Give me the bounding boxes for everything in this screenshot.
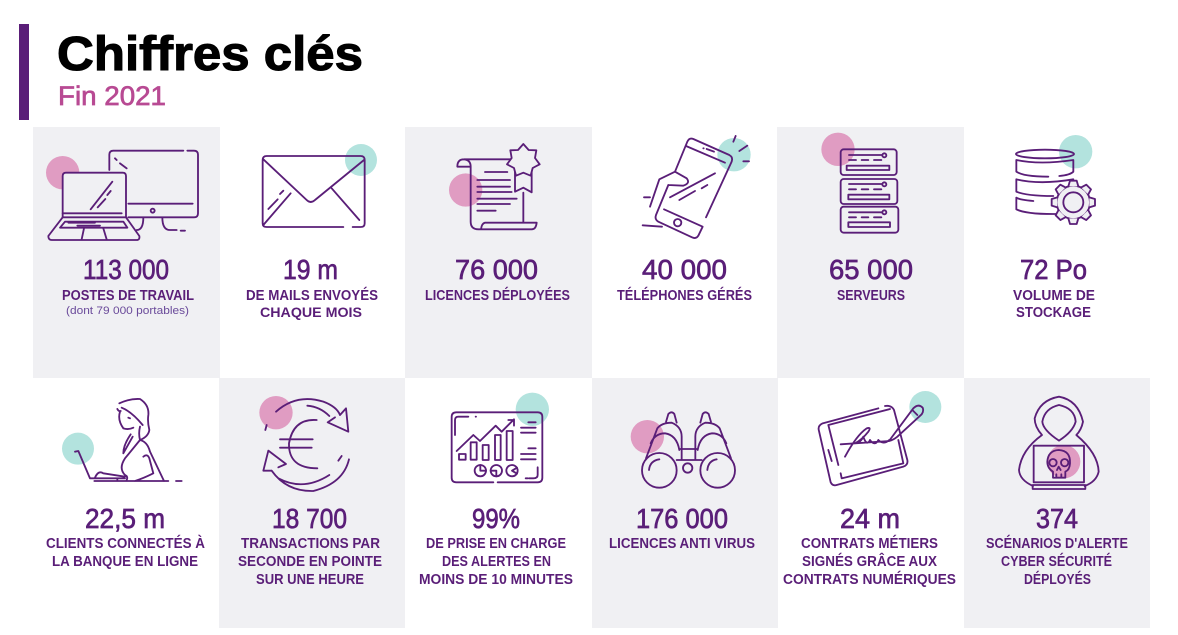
icon: envelope <box>263 144 377 227</box>
value: 19 m <box>283 254 338 285</box>
label: TÉLÉPHONES GÉRÉS <box>617 287 752 304</box>
note: (dont 79 000 portables) <box>66 305 189 317</box>
value: 76 000 <box>455 254 538 285</box>
label: SIGNÉS GRÂCE AUX <box>802 552 937 570</box>
label: DES ALERTES EN <box>442 554 551 570</box>
value: 176 000 <box>636 503 728 534</box>
subtitle: Fin 2021 <box>58 81 166 111</box>
panel: clients connectés <box>33 378 219 628</box>
icon: hooded hacker <box>1019 397 1099 489</box>
label <box>246 287 378 320</box>
panel: postes de travail <box>33 127 220 378</box>
label: LICENCES DÉPLOYÉES <box>425 287 570 304</box>
title: Chiffres clés <box>57 28 363 81</box>
value: 99% <box>472 503 520 534</box>
icon: dashboard <box>452 393 549 482</box>
value: 374 <box>1036 503 1078 534</box>
label: LICENCES ANTI VIRUS <box>609 536 755 552</box>
panel: scénarios <box>964 378 1150 628</box>
value: 40 000 <box>642 254 727 285</box>
label: SERVEURS <box>837 288 905 304</box>
header <box>19 24 363 120</box>
label: CYBER SÉCURITÉ <box>1001 553 1112 570</box>
icon: euro with arrows <box>259 396 349 491</box>
value: 18 700 <box>272 503 347 534</box>
label: CONTRATS NUMÉRIQUES <box>783 571 956 588</box>
panel: transactions <box>219 378 405 628</box>
value: 72 Po <box>1020 254 1087 285</box>
value: 24 m <box>840 503 900 534</box>
label <box>1013 288 1095 321</box>
label: TRANSACTIONS PAR <box>241 536 380 552</box>
label: CONTRATS MÉTIERS <box>801 535 938 552</box>
icon: woman at laptop <box>62 399 182 481</box>
panel: mails <box>220 127 405 378</box>
label: CLIENTS CONNECTÉS À <box>46 535 205 552</box>
value: 65 000 <box>829 254 913 285</box>
panel: contrats <box>778 378 964 628</box>
icon: certificate <box>449 144 540 229</box>
label <box>46 535 205 570</box>
label: POSTES DE TRAVAIL <box>62 288 194 304</box>
label: DÉPLOYÉS <box>1024 571 1091 588</box>
panel: serveurs <box>777 127 964 378</box>
label: MOINS DE 10 MINUTES <box>419 572 573 588</box>
icon: smartphone <box>643 136 751 238</box>
label: SCÉNARIOS D'ALERTE <box>986 535 1128 552</box>
panel: stockage <box>964 127 1150 378</box>
panel: anti virus <box>592 378 778 628</box>
panel: telephones <box>592 127 777 378</box>
label: DE PRISE EN CHARGE <box>426 536 566 552</box>
icon: computers <box>46 151 198 240</box>
label: STOCKAGE <box>1016 305 1091 321</box>
label: SECONDE EN POINTE <box>238 554 382 570</box>
value: 113 000 <box>83 254 169 285</box>
label: DE MAILS ENVOYÉS <box>246 287 378 304</box>
icon: server rack <box>821 133 898 233</box>
panel: licences <box>405 127 592 378</box>
label <box>419 536 573 588</box>
label: SUR UNE HEURE <box>256 572 364 588</box>
value: 22,5 m <box>85 503 165 534</box>
label <box>238 536 382 588</box>
label <box>783 535 956 588</box>
icon: database and gear <box>1016 135 1095 224</box>
label <box>986 535 1128 588</box>
accent bar <box>19 24 29 120</box>
label: CHAQUE MOIS <box>260 304 362 320</box>
panel: alertes <box>405 378 592 628</box>
icon: binoculars <box>631 412 735 488</box>
label: VOLUME DE <box>1013 288 1095 304</box>
icon: tablet signature <box>819 391 941 485</box>
label: LA BANQUE EN LIGNE <box>52 554 198 570</box>
